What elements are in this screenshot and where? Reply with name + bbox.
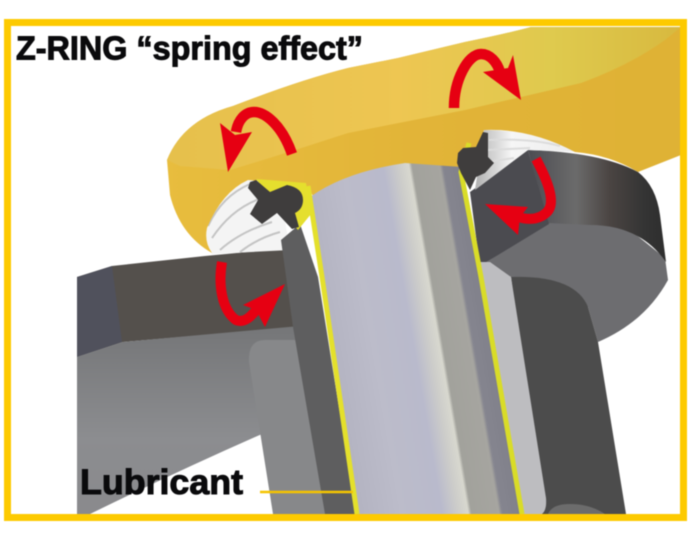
right flange — [470, 150, 668, 514]
left sleeve — [281, 224, 356, 514]
threaded rings — [205, 130, 580, 254]
right seal — [457, 132, 494, 190]
left support tube — [250, 340, 326, 515]
left lubricant film — [308, 186, 357, 514]
arrow: top right rotation — [454, 54, 521, 108]
yellow seal accent — [256, 179, 311, 230]
illustration artwork — [77, 27, 681, 514]
central shaft — [310, 163, 522, 514]
yellow ring — [167, 27, 681, 253]
left seal — [248, 180, 303, 229]
right lubricant film — [461, 143, 522, 514]
left flange — [77, 248, 300, 514]
lubricant leader line — [260, 491, 353, 493]
arrow: left flange rotation — [221, 262, 285, 327]
lubricant label: Lubricant — [80, 463, 243, 502]
arrow: right flange rotation — [485, 159, 551, 235]
arrow: top left rotation — [220, 112, 292, 172]
title: Z-RING “spring effect” — [16, 30, 363, 66]
